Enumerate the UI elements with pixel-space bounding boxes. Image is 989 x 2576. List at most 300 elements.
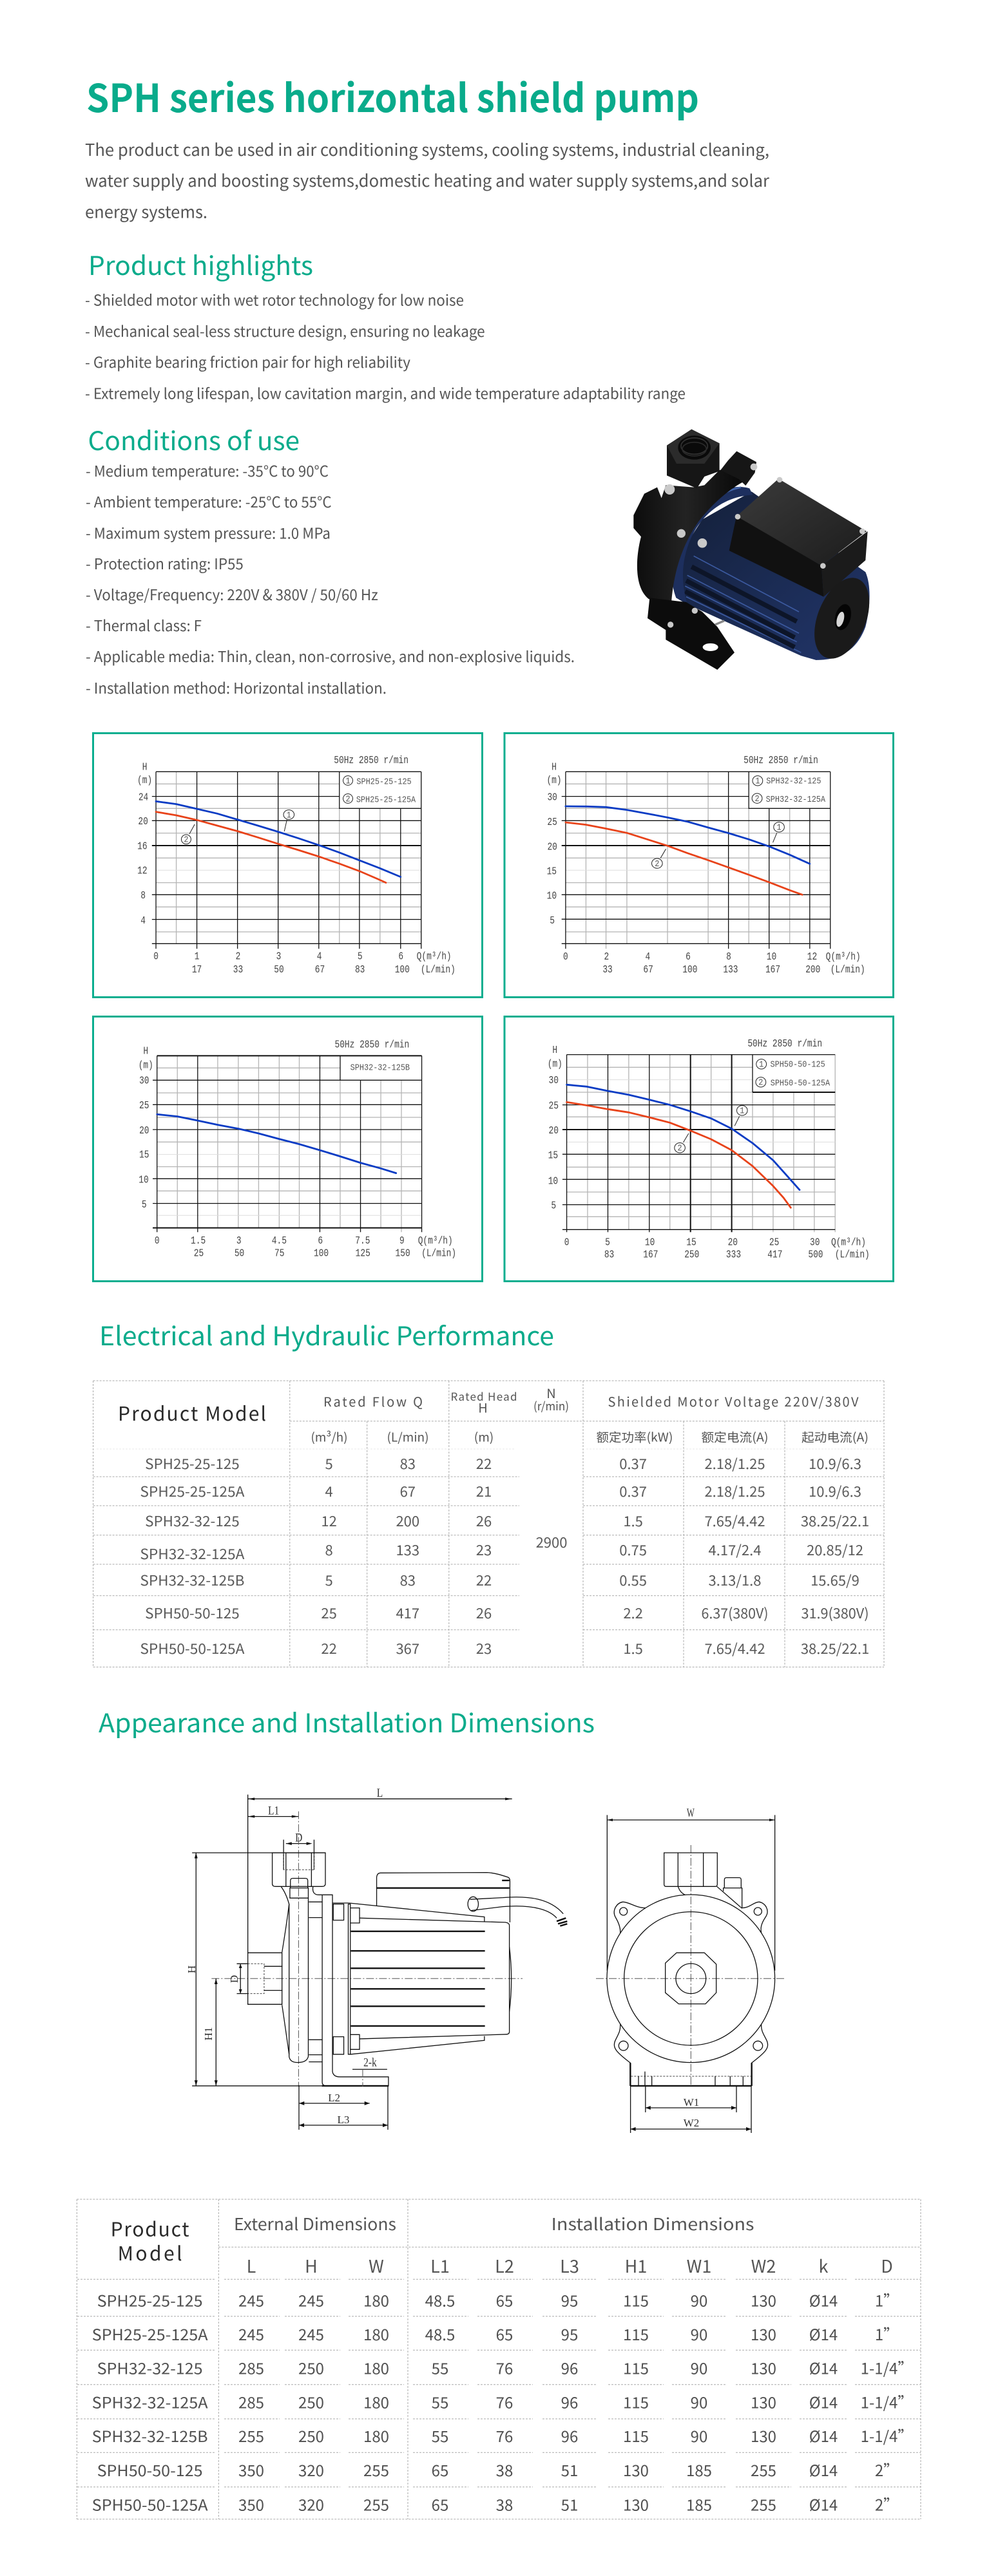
chart: H-Q curves 25-25: 12 <box>137 866 148 877</box>
table header: Model <box>118 2238 182 2266</box>
row SPH32-32-125A: 115 <box>623 2390 649 2412</box>
row SPH25-25-125A: 2.18/1.25 <box>704 1481 765 1501</box>
row SPH32-32-125A: 1-1/4” <box>861 2390 913 2412</box>
chart: H-Q curves 32-32: SPH32-32-125A <box>766 794 825 804</box>
chart: H-Q curves 32-32: 33 <box>602 965 613 976</box>
chart: H-Q curve 32-32-125B: Q(m³/h) <box>418 1236 453 1247</box>
panel: pump curve SPH50-50-125 <box>504 1016 893 1282</box>
chart: H-Q curves 50-50: 167 <box>643 1249 658 1261</box>
chart: H-Q curves 32-32: 10 <box>767 952 776 963</box>
row SPH32-32-125: 200 <box>396 1510 419 1531</box>
table header: (L/min) <box>387 1428 429 1446</box>
row SPH32-32-125: 1-1/4” <box>861 2356 913 2379</box>
diagram: side view with dimensions: D <box>295 1831 302 1844</box>
table header: H <box>478 1397 488 1417</box>
chart: H-Q curves 25-25 <box>137 755 456 976</box>
list: conditions of use: - Applicable media: Thin, clean, non-corrosive, and non-explosive liquids. <box>86 645 575 667</box>
table header: D <box>881 2253 893 2278</box>
row SPH25-25-125: 10.9/6.3 <box>809 1453 861 1473</box>
chart: H-Q curve 32-32-125B: 4.5 <box>272 1236 287 1247</box>
row SPH25-25-125: 5 <box>325 1453 333 1473</box>
table header: Product Model <box>118 1398 266 1426</box>
chart: H-Q curves 50-50: 5 <box>605 1237 610 1249</box>
chart: H-Q curves 32-32: 4 <box>645 952 650 963</box>
chart: H-Q curves 32-32: 100 <box>682 965 698 976</box>
chart: H-Q curves 25-25: Q(m³/h) <box>417 951 452 963</box>
chart: H-Q curve 32-32-125B: 20 <box>139 1126 149 1137</box>
row SPH32-32-125B: 22 <box>476 1569 492 1590</box>
row SPH25-25-125: 48.5 <box>425 2289 455 2311</box>
row SPH50-50-125: 51 <box>561 2458 578 2481</box>
row SPH25-25-125A: SPH25-25-125A <box>92 2322 208 2345</box>
intro paragraph: energy systems. <box>85 200 207 223</box>
table header <box>111 2211 893 2278</box>
dimensions W1 and W2: W2 <box>684 2117 699 2129</box>
row SPH50-50-125A: 7.65/4.42 <box>704 1638 765 1658</box>
row SPH32-32-125B: 255 <box>238 2424 264 2447</box>
chart: H-Q curve 32-32-125B: 100 <box>314 1248 329 1260</box>
row SPH25-25-125A: 4 <box>325 1481 333 1501</box>
row SPH25-25-125A: 90 <box>691 2322 707 2345</box>
table header <box>118 1383 869 1446</box>
row SPH32-32-125A: Ø14 <box>809 2390 838 2412</box>
chart: H-Q curves 32-32: (L/min) <box>831 965 865 976</box>
table header: (r/min) <box>533 1397 569 1414</box>
dimension labels rotated: H1 <box>202 2027 215 2040</box>
row SPH50-50-125 <box>97 2458 899 2481</box>
chart: H-Q curves 32-32: 200 <box>805 965 820 976</box>
chart: H-Q curve 32-32-125B: 30 <box>139 1075 149 1087</box>
chart: H-Q curves 50-50: 25 <box>769 1237 779 1249</box>
chart: H-Q curves 50-50: Q(m³/h) <box>831 1237 866 1249</box>
chart: H-Q curves 32-32: 1 <box>755 776 760 786</box>
chart: H-Q curve 32-32-125B: 7.5 <box>355 1236 370 1247</box>
chart: H-Q curves 25-25: 17 <box>192 965 202 976</box>
list: product highlights: - Extremely long lifespan, low cavitation margin, and wide temperature adaptability range <box>85 381 686 403</box>
table header: Product <box>111 2214 189 2242</box>
row SPH50-50-125A: 23 <box>476 1638 492 1658</box>
chart: H-Q curves 32-32: 8 <box>726 952 731 963</box>
row SPH25-25-125A: 1” <box>875 2322 899 2345</box>
table header: Shielded Motor Voltage 220V/380V <box>608 1392 859 1410</box>
table header: External Dimensions <box>234 2211 396 2235</box>
row SPH32-32-125: 90 <box>691 2356 707 2379</box>
chart: H-Q curves 50-50: 10 <box>645 1237 655 1249</box>
table header: 起动电流(A) <box>802 1428 869 1446</box>
row SPH32-32-125A: SPH32-32-125A <box>92 2390 208 2412</box>
row SPH50-50-125A: 38 <box>496 2492 513 2515</box>
row SPH32-32-125: 12 <box>321 1510 337 1531</box>
row SPH32-32-125: 7.65/4.42 <box>704 1510 765 1531</box>
row SPH50-50-125: 65 <box>432 2458 448 2481</box>
chart: H-Q curves 25-25: 8 <box>140 891 146 902</box>
chart: H-Q curves 32-32: 2 <box>604 952 609 963</box>
row SPH32-32-125B: 55 <box>432 2424 448 2447</box>
row SPH50-50-125: 255 <box>363 2458 389 2481</box>
chart: H-Q curve 32-32-125B: 5 <box>142 1200 147 1211</box>
chart: H-Q curves 32-32: 15 <box>547 866 557 878</box>
chart: H-Q curves 25-25: 33 <box>233 965 243 976</box>
table: external and installation dimensions <box>77 2199 921 2519</box>
chart: H-Q curves 50-50: 333 <box>726 1249 741 1261</box>
row SPH32-32-125B: Ø14 <box>809 2424 838 2447</box>
row SPH25-25-125: 2.18/1.25 <box>704 1453 765 1473</box>
row SPH25-25-125A: 115 <box>623 2322 649 2345</box>
row SPH25-25-125A: 245 <box>298 2322 324 2345</box>
chart: H-Q curve 32-32-125B: 150 <box>396 1248 410 1260</box>
row SPH32-32-125B: 130 <box>751 2424 776 2447</box>
speed value 2900: 2900 <box>536 1531 567 1552</box>
chart: H-Q curves 25-25: 3 <box>276 951 281 963</box>
table header: L3 <box>560 2253 579 2278</box>
row SPH32-32-125A: 55 <box>432 2390 448 2412</box>
dimension labels rotated: H <box>186 1965 198 1973</box>
row SPH25-25-125: 22 <box>476 1453 492 1473</box>
row SPH32-32-125B: 76 <box>496 2424 513 2447</box>
row SPH25-25-125: 0.37 <box>619 1453 647 1473</box>
chart: H-Q curves 32-32: 2 <box>754 793 760 804</box>
chart: H-Q curves 25-25: H <box>142 762 147 773</box>
row SPH50-50-125: 417 <box>396 1602 419 1623</box>
chart: H-Q curves 32-32: 25 <box>547 817 557 829</box>
row SPH50-50-125A: 51 <box>561 2492 578 2515</box>
row SPH25-25-125A: Ø14 <box>809 2322 838 2345</box>
row SPH50-50-125A: SPH50-50-125A <box>92 2492 208 2515</box>
list: product highlights <box>85 289 686 403</box>
panel: pump curve SPH32-32-125B <box>93 1016 482 1282</box>
table header: N <box>546 1383 556 1402</box>
list: conditions of use: - Installation method: Horizontal installation. <box>86 676 387 698</box>
row SPH32-32-125: 130 <box>751 2356 776 2379</box>
chart: H-Q curves 32-32 <box>546 755 865 976</box>
table header: W <box>369 2253 384 2278</box>
chart: H-Q curves 32-32: H <box>552 762 557 773</box>
row SPH32-32-125A: 130 <box>751 2390 776 2412</box>
diagram: side view with dimensions: L <box>377 1786 383 1799</box>
chart: H-Q curves 50-50: 83 <box>604 1249 614 1261</box>
dimensions W1 and W2 <box>631 2085 751 2133</box>
table header: (m) <box>474 1428 494 1446</box>
table: electrical and hydraulic performance <box>93 1381 884 1667</box>
chart: H-Q curves 50-50: 417 <box>767 1249 782 1261</box>
row SPH32-32-125A: 285 <box>238 2390 264 2412</box>
chart: H-Q curves 25-25: 2 <box>184 835 189 845</box>
chart: H-Q curves 50-50: (L/min) <box>835 1249 870 1261</box>
heading: appearance and installation dimensions: Appearance and Installation Dimensions <box>99 1703 595 1740</box>
chart: H-Q curves 50-50: 1 <box>740 1106 745 1116</box>
chart: H-Q curves 25-25: SPH25-25-125A <box>356 795 416 805</box>
diagram: front view with dimensions <box>596 1807 786 2133</box>
row SPH25-25-125: 130 <box>751 2289 776 2311</box>
row SPH50-50-125A: 350 <box>238 2492 264 2515</box>
row SPH32-32-125: 26 <box>476 1510 492 1531</box>
dimensions W1 and W2: W1 <box>684 2096 699 2108</box>
row SPH32-32-125B: 90 <box>691 2424 707 2447</box>
row SPH32-32-125B: 15.65/9 <box>811 1569 859 1590</box>
row SPH32-32-125: 1.5 <box>623 1510 643 1531</box>
row SPH32-32-125B: 115 <box>623 2424 649 2447</box>
row SPH32-32-125B: 5 <box>325 1569 333 1590</box>
row SPH50-50-125A: 2” <box>875 2492 899 2515</box>
panel: pump curve SPH32-32-125 <box>504 733 893 997</box>
chart: H-Q curves 50-50: (m) <box>548 1059 562 1070</box>
table header: Installation Dimensions <box>552 2211 754 2235</box>
intro paragraph <box>85 137 770 223</box>
row SPH50-50-125A: 255 <box>363 2492 389 2515</box>
table header: W2 <box>751 2253 776 2278</box>
row SPH50-50-125A: 1.5 <box>623 1638 643 1658</box>
chart: H-Q curves 50-50: 5 <box>551 1200 556 1212</box>
list: conditions of use: - Voltage/Frequency: 220V & 380V / 50/60 Hz <box>86 583 378 605</box>
product illustration: shield pump <box>633 430 880 670</box>
row SPH50-50-125: 350 <box>238 2458 264 2481</box>
row SPH50-50-125: SPH50-50-125 <box>97 2458 203 2481</box>
row SPH32-32-125B: SPH32-32-125B <box>140 1569 244 1590</box>
row SPH32-32-125B <box>92 2424 913 2447</box>
row SPH25-25-125A: 130 <box>751 2322 776 2345</box>
row SPH25-25-125: 95 <box>561 2289 578 2311</box>
chart: H-Q curves 50-50: SPH50-50-125A <box>771 1078 830 1088</box>
chart: H-Q curves 50-50: 2 <box>758 1077 763 1088</box>
row SPH32-32-125: SPH32-32-125 <box>97 2356 203 2379</box>
row SPH25-25-125A: 48.5 <box>425 2322 455 2345</box>
row SPH50-50-125: 2” <box>875 2458 899 2481</box>
row SPH25-25-125: 65 <box>496 2289 513 2311</box>
chart: H-Q curves 50-50: 1 <box>759 1059 763 1070</box>
row SPH32-32-125: 55 <box>432 2356 448 2379</box>
row SPH32-32-125A <box>140 1539 863 1564</box>
title: SPH series horizontal shield pump <box>86 68 699 124</box>
row SPH32-32-125A <box>92 2390 913 2412</box>
row SPH50-50-125: 31.9(380V) <box>802 1602 869 1623</box>
list: conditions of use: - Medium temperature: -35°C to 90°C <box>86 459 329 481</box>
chart: H-Q curve 32-32-125B: 9 <box>399 1236 405 1247</box>
row SPH50-50-125A: 22 <box>321 1638 337 1658</box>
chart: H-Q curves 25-25: (m) <box>137 775 152 787</box>
table header: k <box>819 2253 829 2278</box>
chart: H-Q curves 32-32: 30 <box>547 792 557 804</box>
chart: H-Q curve 32-32-125B: 3 <box>236 1236 242 1247</box>
chart: H-Q curves 50-50: 500 <box>808 1249 823 1261</box>
chart: H-Q curves 32-32: SPH32-32-125 <box>766 776 821 786</box>
row SPH25-25-125A <box>140 1481 861 1501</box>
row SPH50-50-125A <box>140 1638 869 1658</box>
row SPH50-50-125A: 320 <box>298 2492 324 2515</box>
dimension labels rotated: D <box>228 1975 240 1983</box>
row SPH50-50-125: 38 <box>496 2458 513 2481</box>
row SPH50-50-125A: 38.25/22.1 <box>801 1638 869 1658</box>
dimensions L2 and L3: L2 <box>328 2092 340 2104</box>
row SPH50-50-125 <box>145 1602 869 1623</box>
row SPH32-32-125A: 90 <box>691 2390 707 2412</box>
chart: H-Q curves 25-25: 6 <box>398 951 403 963</box>
chart: H-Q curves 50-50: 10 <box>548 1176 558 1188</box>
row SPH25-25-125: 115 <box>623 2289 649 2311</box>
chart: H-Q curves 32-32: 0 <box>563 952 568 963</box>
row SPH32-32-125A: 180 <box>363 2390 389 2412</box>
list: product highlights: - Shielded motor with wet rotor technology for low noise <box>85 289 464 310</box>
chart: H-Q curves 25-25: 100 <box>395 965 410 976</box>
row SPH32-32-125 <box>97 2356 913 2379</box>
row SPH25-25-125 <box>145 1453 861 1473</box>
chart: H-Q curves 25-25: SPH25-25-125 <box>356 776 412 787</box>
chart: H-Q curves 50-50: 50Hz 2850 r/min <box>747 1039 822 1050</box>
row SPH25-25-125A: SPH25-25-125A <box>140 1481 245 1501</box>
dimensions L2 and L3: L3 <box>338 2114 349 2126</box>
row SPH25-25-125A: 67 <box>400 1481 416 1501</box>
chart: H-Q curves 32-32: (m) <box>546 775 562 787</box>
row SPH50-50-125A: 255 <box>751 2492 776 2515</box>
chart: H-Q curves 50-50: 15 <box>548 1150 558 1162</box>
row SPH25-25-125A <box>92 2322 899 2345</box>
dimensions L2 and L3 <box>299 2085 388 2130</box>
row SPH50-50-125A: 185 <box>686 2492 712 2515</box>
chart: H-Q curves 50-50: SPH50-50-125 <box>770 1059 825 1070</box>
row SPH32-32-125: Ø14 <box>809 2356 838 2379</box>
intro paragraph: The product can be used in air conditioning systems, cooling systems, industrial cleaning, <box>85 137 769 161</box>
chart: H-Q curves 50-50: 2 <box>678 1143 682 1153</box>
chart: H-Q curves 32-32: 133 <box>723 965 738 976</box>
row SPH32-32-125B: 96 <box>561 2424 578 2447</box>
row SPH25-25-125: 245 <box>298 2289 324 2311</box>
row SPH32-32-125: 38.25/22.1 <box>801 1510 869 1531</box>
list: conditions of use: - Maximum system pressure: 1.0 MPa <box>86 522 331 544</box>
row SPH32-32-125: 76 <box>496 2356 513 2379</box>
row SPH32-32-125B: 250 <box>298 2424 324 2447</box>
row SPH50-50-125A <box>92 2492 899 2515</box>
chart: H-Q curves 25-25: 1 <box>195 951 199 963</box>
chart: H-Q curves 50-50 <box>548 1039 870 1261</box>
chart: H-Q curves 32-32: 12 <box>807 952 817 963</box>
row SPH50-50-125: SPH50-50-125 <box>145 1602 240 1623</box>
row SPH25-25-125A: 21 <box>476 1481 492 1501</box>
chart: H-Q curves 32-32: 20 <box>547 842 557 853</box>
chart: H-Q curves 50-50: 250 <box>684 1249 699 1261</box>
row SPH32-32-125A: 133 <box>396 1539 419 1560</box>
chart: H-Q curves 25-25: 4 <box>140 916 146 927</box>
row SPH50-50-125A: Ø14 <box>809 2492 838 2515</box>
list: product highlights: - Graphite bearing friction pair for high reliability <box>85 350 410 372</box>
table header: H1 <box>625 2253 647 2278</box>
chart: H-Q curves 32-32: 2 <box>655 858 659 869</box>
table header: H <box>305 2253 318 2278</box>
chart: H-Q curves 50-50: 0 <box>564 1237 569 1249</box>
table header: L1 <box>430 2253 450 2278</box>
row SPH25-25-125A: 95 <box>561 2322 578 2345</box>
chart: H-Q curves 32-32: 1 <box>777 822 782 833</box>
list: conditions of use: - Thermal class: F <box>86 614 202 636</box>
chart: H-Q curves 25-25: 83 <box>355 965 365 976</box>
chart: H-Q curves 32-32: 10 <box>547 891 557 902</box>
row SPH50-50-125A: 65 <box>432 2492 448 2515</box>
list: conditions of use <box>86 459 575 698</box>
chart: H-Q curve 32-32-125B: 75 <box>274 1248 284 1260</box>
diagram: side view with dimensions <box>186 1786 567 2130</box>
row SPH25-25-125: 245 <box>238 2289 264 2311</box>
table header: Rated Flow Q <box>323 1392 423 1410</box>
row SPH32-32-125: 285 <box>238 2356 264 2379</box>
heading: conditions of use: Conditions of use <box>88 421 300 458</box>
diagram: front view with dimensions: W <box>687 1807 695 1820</box>
chart: H-Q curve 32-32-125B: 125 <box>356 1248 370 1260</box>
table header: (m³/h) <box>311 1428 348 1446</box>
row SPH50-50-125: 130 <box>623 2458 649 2481</box>
row SPH50-50-125A: 367 <box>396 1638 419 1658</box>
heading: product highlights: Product highlights <box>88 245 313 283</box>
row SPH50-50-125: 2.2 <box>623 1602 643 1623</box>
row SPH25-25-125A: 65 <box>496 2322 513 2345</box>
dimension labels rotated <box>186 1965 240 2040</box>
row SPH25-25-125A: 245 <box>238 2322 264 2345</box>
chart: H-Q curves 50-50: 15 <box>686 1237 696 1249</box>
chart: H-Q curves 50-50: 30 <box>549 1075 559 1087</box>
chart: H-Q curves 32-32: 5 <box>550 916 555 927</box>
diagram: side view with dimensions: L1 <box>268 1804 279 1817</box>
row SPH32-32-125B: SPH32-32-125B <box>92 2424 208 2447</box>
chart: H-Q curve 32-32-125B: 50 <box>235 1248 244 1260</box>
chart: H-Q curves 32-32: Q(m³/h) <box>826 952 861 963</box>
chart: H-Q curve 32-32-125B: 25 <box>194 1248 204 1260</box>
chart: H-Q curves 32-32: 167 <box>765 965 780 976</box>
chart: H-Q curve 32-32-125B: SPH32-32-125B <box>350 1063 410 1073</box>
row SPH32-32-125A: SPH32-32-125A <box>140 1543 245 1564</box>
chart: H-Q curves 25-25: 0 <box>153 951 158 963</box>
chart: H-Q curve 32-32-125B: 15 <box>139 1150 149 1161</box>
chart: H-Q curves 50-50: 20 <box>549 1126 559 1137</box>
table header: L2 <box>495 2253 514 2278</box>
row SPH25-25-125: 90 <box>691 2289 707 2311</box>
chart: H-Q curves 25-25: 50Hz 2850 r/min <box>334 755 408 767</box>
chart: H-Q curves 50-50: H <box>552 1045 557 1057</box>
row SPH25-25-125: 180 <box>363 2289 389 2311</box>
chart: H-Q curves 32-32: 50Hz 2850 r/min <box>744 755 818 767</box>
row SPH25-25-125 <box>97 2289 899 2311</box>
row SPH32-32-125B: 1-1/4” <box>861 2424 913 2447</box>
chart: H-Q curves 50-50: 30 <box>810 1237 820 1249</box>
chart: H-Q curves 25-25: 50 <box>274 965 284 976</box>
row SPH32-32-125A: 8 <box>325 1539 333 1560</box>
chart: H-Q curves 25-25: 2 <box>345 794 350 804</box>
row SPH32-32-125A: 96 <box>561 2390 578 2412</box>
row SPH32-32-125A: 23 <box>476 1539 492 1560</box>
chart: H-Q curve 32-32-125B: 6 <box>318 1236 323 1247</box>
list: product highlights: - Mechanical seal-less structure design, ensuring no leakage <box>85 319 485 341</box>
row SPH25-25-125A: 10.9/6.3 <box>809 1481 861 1501</box>
table header: Rated Head <box>451 1388 517 1404</box>
table header: W1 <box>687 2253 711 2278</box>
row SPH50-50-125A: 130 <box>623 2492 649 2515</box>
chart: H-Q curve 32-32-125B <box>139 1039 456 1260</box>
list: conditions of use: - Protection rating: IP55 <box>86 552 244 574</box>
chart: H-Q curves 25-25: 5 <box>358 951 363 963</box>
row SPH32-32-125A: 20.85/12 <box>807 1539 863 1560</box>
panel: pump curve SPH25-25-125 <box>93 733 482 997</box>
row SPH32-32-125B <box>140 1569 859 1590</box>
row SPH32-32-125A: 4.17/2.4 <box>709 1539 761 1560</box>
chart: H-Q curves 25-25: 2 <box>236 951 240 963</box>
row SPH32-32-125A: 250 <box>298 2390 324 2412</box>
chart: H-Q curve 32-32-125B: (m) <box>139 1060 153 1072</box>
row SPH32-32-125: 96 <box>561 2356 578 2379</box>
chart: H-Q curves 25-25: 67 <box>315 965 325 976</box>
row SPH32-32-125: 250 <box>298 2356 324 2379</box>
chart: H-Q curve 32-32-125B: H <box>143 1046 148 1057</box>
row SPH50-50-125: 6.37(380V) <box>701 1602 768 1623</box>
chart: H-Q curves 50-50: 25 <box>549 1101 559 1112</box>
intro paragraph: water supply and boosting systems,domestic heating and water supply systems,and solar <box>85 168 770 192</box>
table header: L <box>247 2253 256 2278</box>
row SPH50-50-125: 255 <box>751 2458 776 2481</box>
